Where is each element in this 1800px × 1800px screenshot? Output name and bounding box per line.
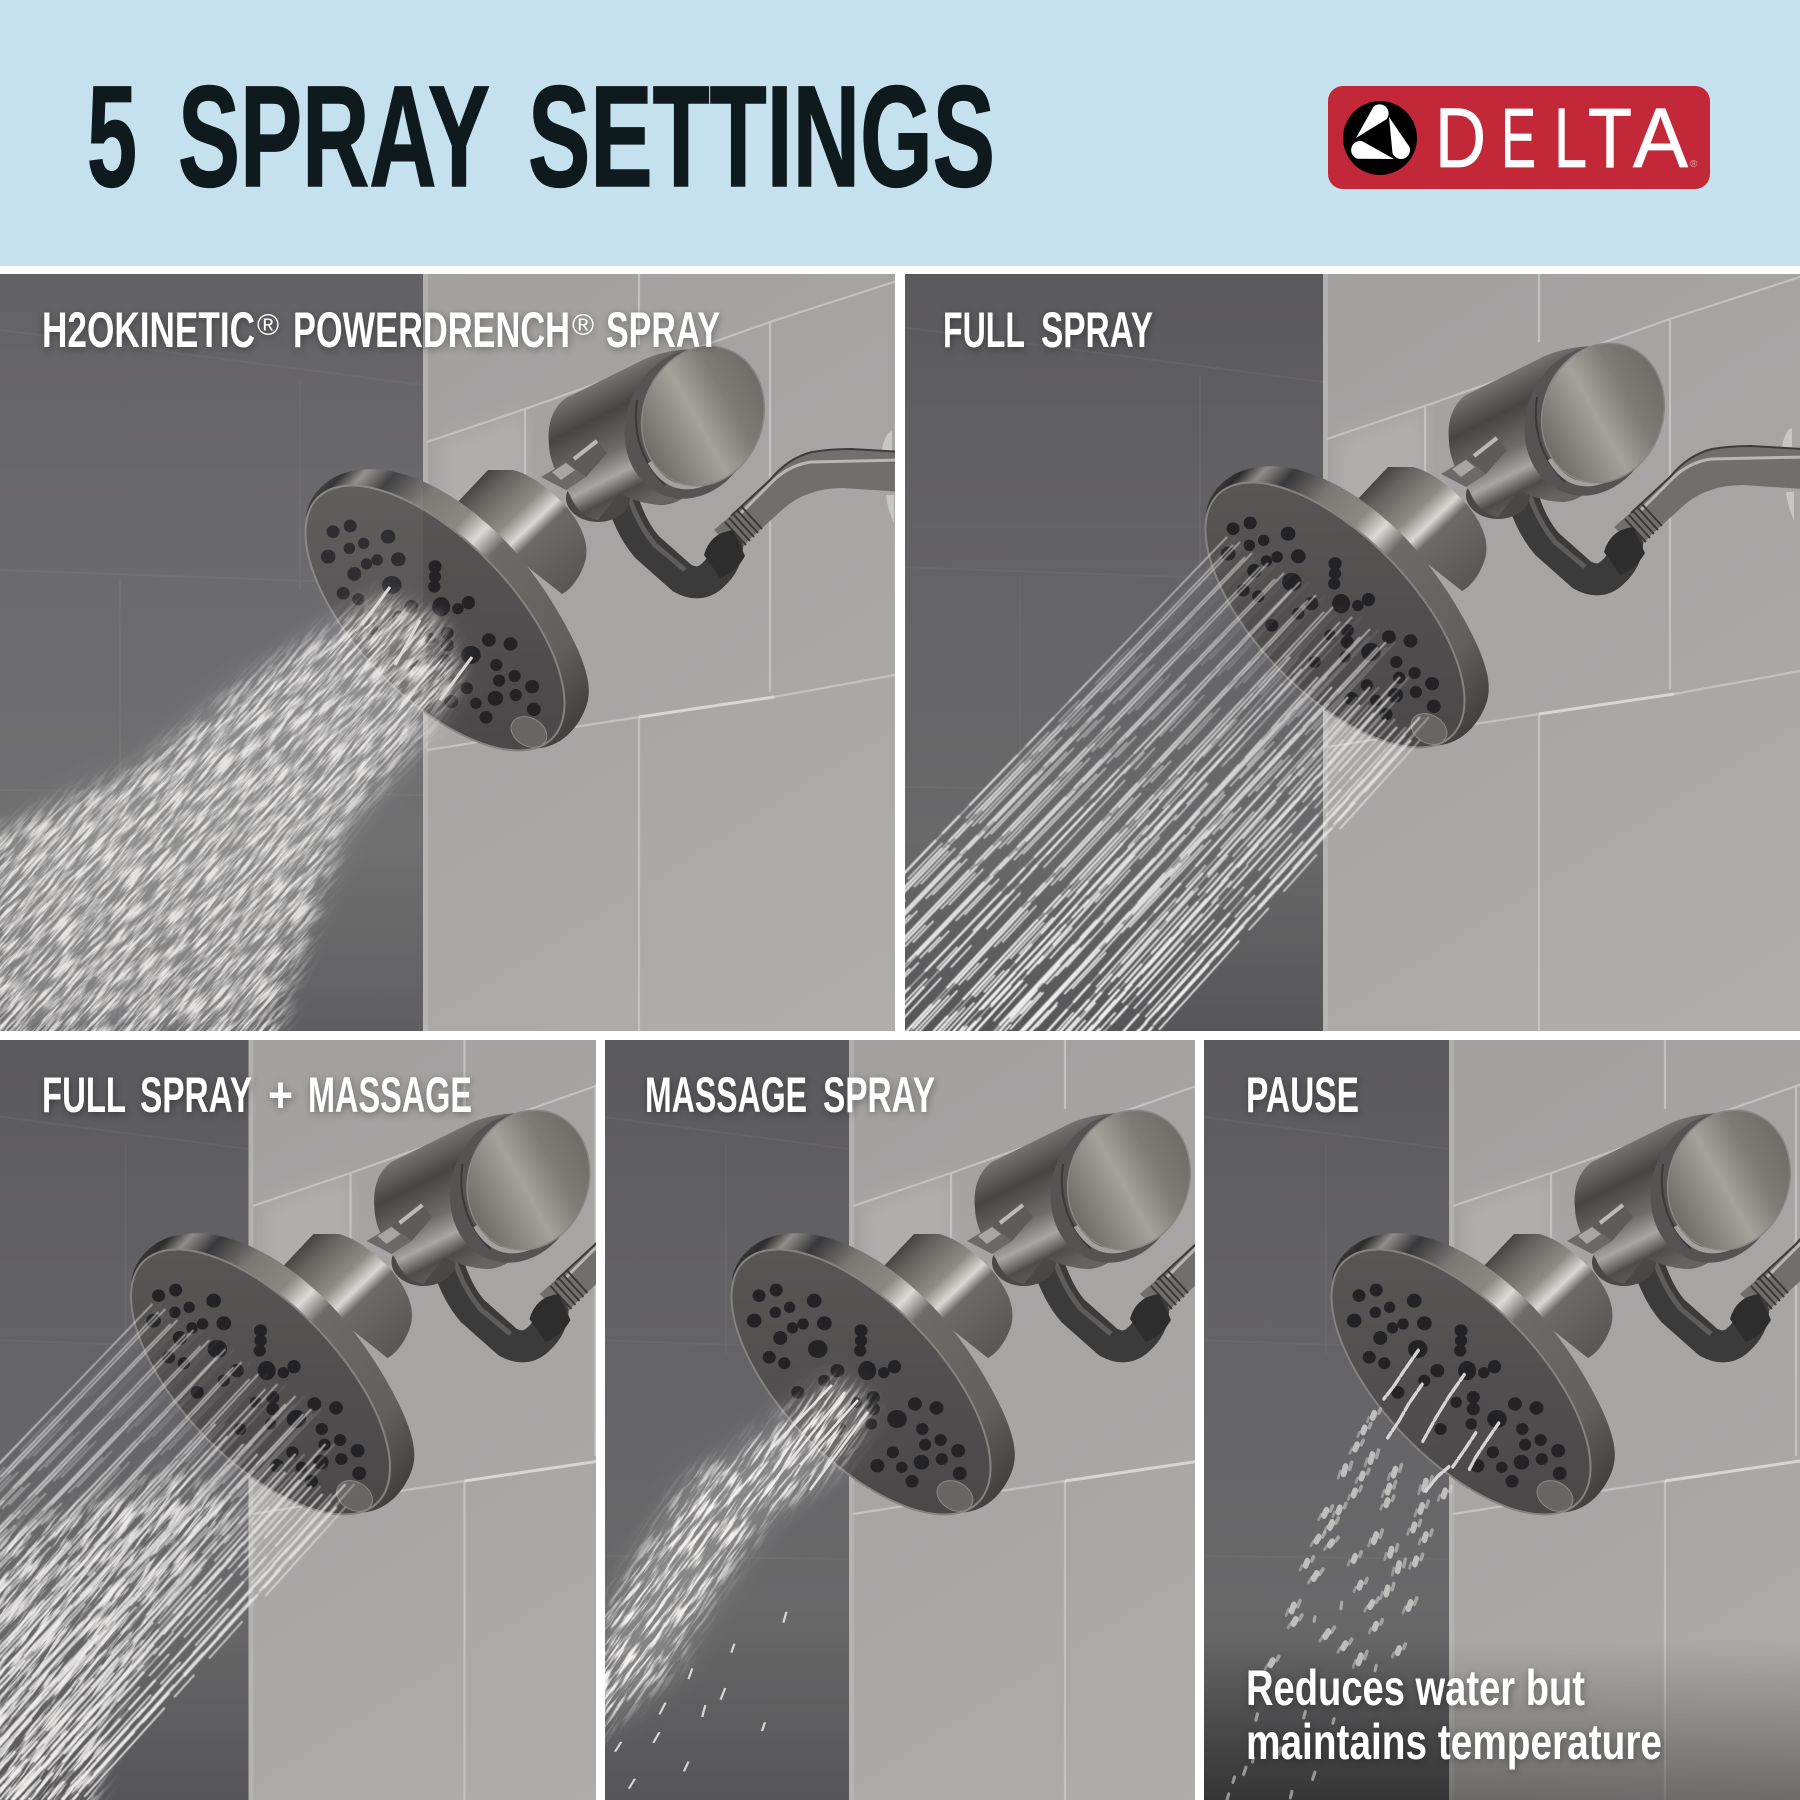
bottom shading — [1204, 1640, 1800, 1800]
heading: FULL — [42, 1067, 126, 1123]
logo wordmark: L — [1554, 91, 1587, 185]
logo wordmark: ® — [1690, 159, 1698, 170]
logo wordmark — [1435, 91, 1698, 185]
heading: PAUSE — [1246, 1067, 1359, 1123]
heading: SPRAY — [1041, 302, 1153, 358]
logo wordmark: T — [1588, 91, 1632, 185]
heading: + — [268, 1067, 293, 1123]
heading: FULL — [943, 302, 1025, 358]
header band — [0, 0, 1800, 266]
glass brightening — [0, 274, 423, 1031]
panel: full spray + massage — [0, 1040, 596, 1800]
heading: H2OKINETIC — [42, 302, 255, 358]
heading: ® — [572, 309, 594, 342]
panel: H2Okinetic PowerDrench spray — [0, 274, 895, 1031]
spray: pause droplets — [1227, 1350, 1499, 1799]
spray: parallel water jets — [751, 537, 1429, 1033]
heading — [42, 302, 720, 358]
heading: SPRAY — [823, 1067, 935, 1123]
panel: full spray — [905, 274, 1800, 1031]
note text: maintains temperature — [1246, 1714, 1662, 1770]
logo wordmark: E — [1501, 91, 1536, 185]
heading: MASSAGE — [645, 1067, 807, 1123]
title: SPRAY — [178, 56, 490, 217]
shower head on tile wall — [900, 267, 1800, 1033]
heading: ® — [257, 309, 279, 342]
note text: Reduces water but — [1246, 1660, 1585, 1716]
spray: narrow massage jet — [605, 1367, 884, 1789]
title: SETTINGS — [528, 56, 995, 217]
note text — [1246, 1660, 1662, 1770]
logo wordmark: D — [1435, 91, 1486, 185]
heading: POWERDRENCH — [293, 302, 570, 358]
heading: SPRAY — [140, 1067, 252, 1123]
spray: water jets with massage core — [0, 1304, 354, 1800]
shower head on tile wall — [1026, 1034, 1800, 1800]
heading: MASSAGE — [308, 1067, 472, 1123]
logo: Delta — [1328, 86, 1710, 189]
heading — [943, 302, 1153, 358]
spray: dense mottled cone — [0, 585, 474, 1031]
panel: massage spray — [605, 1040, 1195, 1800]
heading — [42, 1067, 472, 1123]
title: 5 — [87, 56, 137, 217]
shower head on tile wall — [0, 1034, 728, 1800]
panel: pause — [1204, 1040, 1800, 1800]
title — [87, 56, 995, 217]
icon: Delta triangle mark — [1343, 101, 1417, 175]
heading: SPRAY — [606, 302, 720, 358]
logo wordmark: A — [1633, 91, 1688, 185]
shower head on tile wall — [426, 1034, 1329, 1800]
shower head on tile wall — [0, 270, 903, 1036]
